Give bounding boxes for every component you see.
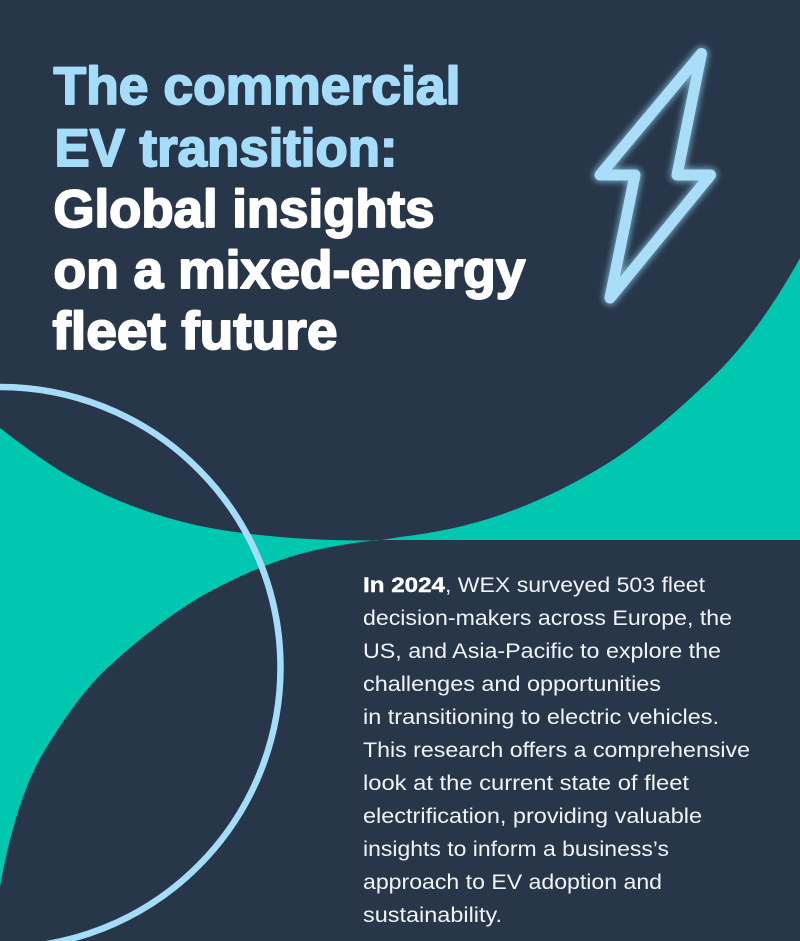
icon: neon lightning bolt: [600, 54, 710, 298]
intro paragraph: in transitioning to electric vehicles.: [363, 705, 719, 729]
teal curved band: [0, 258, 800, 887]
intro paragraph: insights to inform a business’s: [363, 837, 669, 861]
intro paragraph: In 2024: [363, 573, 445, 597]
intro paragraph: look at the current state of fleet: [363, 771, 689, 795]
intro paragraph: sustainability.: [363, 903, 502, 927]
title: fleet future: [52, 302, 338, 361]
light blue ring: [0, 387, 280, 941]
intro paragraph: decision-makers across Europe, the: [363, 606, 732, 630]
title: The commercial: [54, 57, 460, 116]
intro paragraph: [363, 573, 750, 927]
intro paragraph: , WEX surveyed 503 fleet: [445, 573, 705, 597]
title: Global insights: [54, 180, 434, 239]
intro paragraph: US, and Asia-Pacific to explore the: [363, 639, 721, 663]
title: EV transition:: [54, 119, 398, 178]
title: [52, 57, 526, 361]
intro paragraph: approach to EV adoption and: [363, 870, 662, 894]
intro paragraph: This research offers a comprehensive: [363, 738, 750, 762]
intro paragraph: challenges and opportunities: [363, 672, 661, 696]
intro paragraph: electrification, providing valuable: [363, 804, 702, 828]
title: on a mixed-energy: [54, 241, 526, 300]
